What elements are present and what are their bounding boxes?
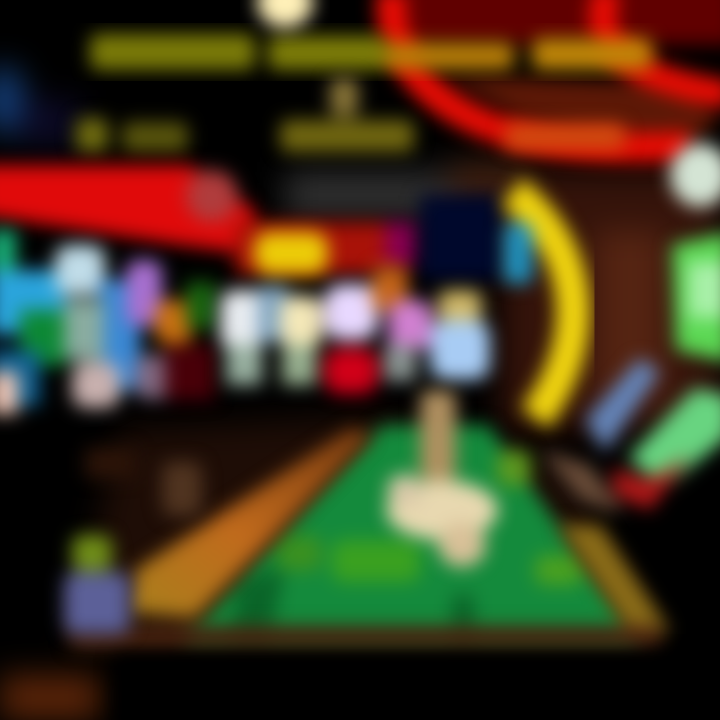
red ceiling arcs (391, 0, 720, 150)
subtitle: illegible yellow text (76, 78, 625, 152)
title: illegible yellow heading (90, 34, 652, 70)
green felt table (182, 425, 640, 642)
ceiling lamp (257, 0, 313, 28)
right side screens and machines (540, 143, 720, 625)
foreground patrons (64, 448, 202, 634)
foreground dark counter (115, 656, 720, 720)
slot machines: left bank (0, 230, 216, 414)
slot machines: centre bank (220, 232, 490, 394)
yellow curved arch (503, 192, 573, 418)
red banner (0, 165, 500, 280)
wooden table edge (70, 428, 670, 648)
dealer figure and chips (386, 390, 498, 567)
